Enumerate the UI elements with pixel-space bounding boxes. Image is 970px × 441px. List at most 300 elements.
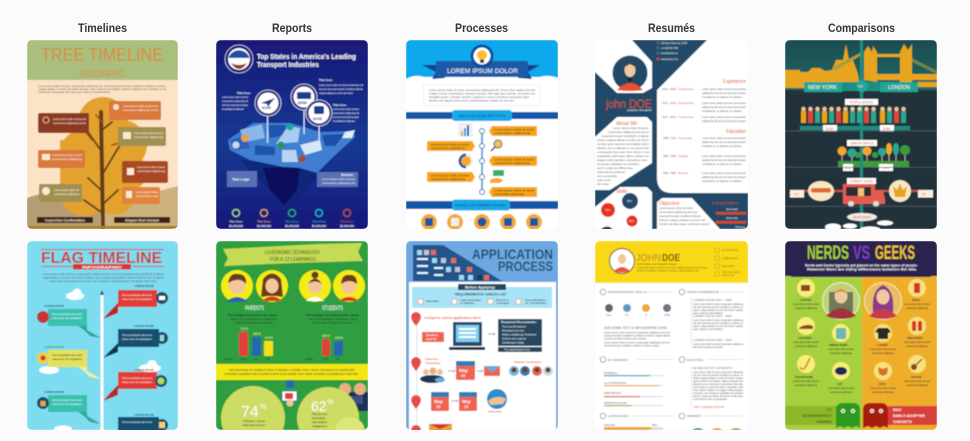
languages: Languages — [712, 200, 738, 205]
source box: Lorem ipsum dolor sit amet — [322, 178, 355, 181]
left item: loafers: LOAFERS — [798, 336, 811, 340]
event box: orange right: consectetur sed — [136, 195, 159, 198]
parents heading: PARENTS — [245, 306, 264, 312]
street food label: STREET FOOD — [850, 180, 874, 184]
stat pin: rail — [306, 100, 332, 146]
yellow header — [595, 241, 748, 283]
about me — [597, 121, 650, 186]
contact details: Tel: 1-202-55-0179 — [722, 249, 738, 252]
people row — [801, 107, 906, 123]
add text block: Lorem ipsum dolor sit amet consectetur adipiscing elit sed — [604, 342, 671, 344]
tree foliage — [59, 97, 147, 216]
portrait — [612, 56, 648, 91]
avatar — [610, 248, 634, 274]
bottom state stats: Title Goes — [312, 220, 326, 224]
intro text: commodo consequat duis aute irure dolor in reprehenderit voluptate velit esse — [49, 280, 158, 283]
contact list: 100 Queen Street City, 12345 — [661, 42, 687, 45]
education text: elit sed eiusmod tempor incididunt ut labore et — [693, 374, 743, 377]
clouds — [39, 288, 161, 432]
skill icons: Pro — [625, 314, 629, 317]
left item: loafers — [793, 317, 819, 348]
about me: laboris nisi ut aliquip ex ea commodo — [597, 147, 650, 150]
yellow banner: CHILDREN LEARNING AND STUDENTS WHO ALSO AGREE THAT THEIR LEARNING EXPERIENCE IS BETTER — [224, 373, 358, 376]
callout texts: Title Goes — [237, 91, 251, 95]
language bar — [604, 424, 663, 430]
event box: olive left: Lorem ipsum dolor sit — [54, 189, 79, 192]
contact details — [714, 248, 740, 277]
flag 5 red: natus error sit voluptatem — [122, 381, 152, 384]
event box: brown left: Lorem ipsum dolor sit amet elit — [53, 118, 86, 121]
deadline box — [422, 332, 444, 342]
parents bar chart: 64% — [265, 335, 273, 340]
flag 2 teal — [37, 304, 101, 338]
right item: sneakers: consectetur adipiscing — [906, 345, 929, 348]
experience: 2012 - 2013 — [662, 102, 677, 105]
stat circle 62 percent: 62 — [311, 398, 327, 414]
step 2 box: Lorem ipsum dolor sit amet — [431, 144, 469, 146]
work timeline: quis nostrud exercitation — [693, 328, 724, 331]
left item: saxophone: consectetur adipiscing — [795, 384, 818, 387]
name: JOHN — [636, 252, 661, 264]
step 3 box: Lorem ipsum dolor sit amet — [494, 158, 534, 162]
selection committee label: Selection — [425, 357, 439, 361]
event box: orange top: Lorem ipsum dolor sit amet elit — [123, 105, 158, 108]
footer labels: Aliquam Erat Volutpat — [125, 218, 160, 222]
subtitle: infographic: INFOGRAPHIC — [79, 69, 124, 79]
eligible candidates — [509, 360, 553, 376]
committee people — [420, 368, 445, 383]
card: tree timeline — [27, 40, 178, 229]
education text: HE BELOW ANY UNIVERSITY — [693, 366, 733, 370]
callout texts: Title Goes — [319, 78, 333, 82]
laptop — [449, 322, 485, 350]
card: reports — [216, 40, 368, 229]
green space values: 40% — [883, 166, 889, 170]
contact details: email@email.com — [722, 257, 738, 260]
stat circle 62 percent: engagement — [312, 425, 327, 428]
parents bar chart: K-12 — [241, 358, 247, 361]
event box: brown left — [38, 113, 89, 133]
card: application process — [406, 241, 558, 435]
contact details: Street Studio — [722, 265, 735, 268]
interest bars: WEB DESIGN — [604, 392, 621, 395]
left item: cat — [828, 362, 854, 394]
work timeline: Lorem ipsum dolor sit amet consectetur adipiscing — [693, 343, 744, 346]
parents bar chart: 3-5 — [254, 358, 258, 361]
stat pin: rail: $12M — [313, 117, 322, 121]
add text block: eiusmod tempor incididunt ut labore et dolore magna — [604, 344, 660, 348]
flag 6 teal: Sed ut perspiciatis unde omnis — [52, 399, 83, 402]
experience: adipiscing elit sed do eiusmod tempor — [702, 106, 746, 109]
right item: guitar: GUITAR — [911, 375, 922, 379]
students bar chart: 65% — [322, 333, 330, 338]
callout texts: sed do eiusmod tempor — [333, 116, 359, 119]
about me: unde omnis — [597, 179, 612, 182]
white shape: objective — [657, 198, 720, 229]
checklist band: or challenge — [460, 302, 475, 305]
left item: cat: consectetur adipiscing — [830, 391, 853, 394]
languages — [712, 200, 746, 229]
students note: use of technology in classroom helps — [308, 318, 359, 321]
intro text: commodo consequat duis aute irure dolor in reprehenderit — [38, 91, 110, 94]
building graphic — [413, 245, 502, 281]
tree trunk — [84, 112, 124, 229]
left item: loafers: Lorem ipsum dolor sit amet — [793, 341, 819, 344]
right item: dog — [870, 362, 896, 394]
checklist band: Before Applying: — [465, 286, 495, 290]
title: flag timeline: FLAG TIMELINE — [41, 250, 162, 267]
about me: consectetur adipiscing elit sed do — [608, 131, 650, 134]
calendar may 15: May — [434, 399, 443, 404]
contact list: jonedoe@jonedoe.com — [660, 52, 678, 55]
section: work experience: WORK EXPERIENCE — [687, 290, 719, 294]
callout texts: incididunt labore — [333, 120, 356, 123]
left item: coffee — [793, 279, 819, 310]
portrait: student girl — [299, 270, 331, 302]
required documents panel: Test confirmations — [502, 326, 527, 328]
white shape: about — [595, 117, 652, 190]
add text block: ut enim ad minim veniam quis nostrud — [604, 338, 647, 340]
header — [785, 241, 937, 276]
right item: guitar — [904, 355, 930, 387]
experience: Lorem ipsum dolor sit amet consectetur — [702, 102, 746, 105]
about me: voluptate velit esse cillum dolore eu — [597, 155, 650, 158]
population values — [785, 125, 937, 132]
left item: saxophone: Lorem ipsum dolor sit amet — [793, 380, 819, 383]
envelope — [484, 366, 500, 376]
step 5 box — [489, 187, 537, 197]
right item: guitar: Lorem ipsum dolor sit amet — [904, 380, 930, 383]
education text — [691, 366, 744, 409]
work timeline: Lorem ipsum dolor sit amet consectetur adipiscing — [693, 319, 744, 322]
step 1 box — [489, 126, 537, 136]
education: Lorem ipsum dolor sit amet consectetur — [702, 155, 746, 158]
education: adipiscing elit sed do eiusmod tempor — [702, 159, 746, 162]
languages: Italian Language — [726, 208, 738, 211]
education text: quis nostrud exercitation ullamco laboris nisi — [693, 380, 743, 383]
about me: dolore magna aliqua ut enim ad minim — [597, 139, 649, 142]
eligible candidates: Eligible Candidates — [514, 360, 542, 364]
callout texts: Lorem ipsum dolor sit amet — [222, 96, 248, 99]
flag 3 navy — [103, 324, 168, 358]
about me: consequat duis aute irure dolor in rep — [597, 151, 650, 154]
event box: olive right — [118, 127, 166, 146]
subtitle: However there are many differences between the two. — [807, 268, 917, 272]
intro text — [42, 273, 165, 283]
right item: soda: consectetur adipiscing — [906, 307, 929, 310]
subtitle — [805, 264, 918, 272]
trees — [838, 143, 910, 167]
stat circle 74 percent: Children report — [243, 420, 265, 423]
event box: rust right — [122, 161, 168, 183]
flag 3 navy: Sed ut perspiciatis unde omnis — [122, 334, 153, 337]
callout texts: magna aliqua ut enim ad minim — [319, 92, 353, 95]
contact list: www.jonedoe.com — [661, 58, 678, 61]
parents note: improves student outcomes — [235, 322, 274, 324]
right item: soda — [904, 279, 930, 310]
logo box: Your Logo — [232, 178, 249, 182]
intro text: Lorem ipsum dolor sit amet, consectetur adipiscing elit, sed do eiusmod tempor incididunt ut labore — [42, 273, 165, 276]
right item: sneakers: SNEAKERS — [907, 336, 923, 340]
education text: 1997 LOREM IPSUM — [693, 405, 725, 409]
city band: LONDON — [888, 85, 910, 91]
event box: olive right: Lorem ipsum dolor sit amet — [134, 132, 163, 135]
flag 7 navy — [118, 413, 168, 435]
left item: dress shirt: consectetur adipiscing — [830, 352, 853, 355]
calendar may 05: May — [459, 368, 468, 373]
work timeline: elit sed eiusmod tempor — [693, 346, 723, 349]
white shape: skills — [595, 187, 652, 229]
education: incididunt ut labore et dolore — [702, 180, 743, 183]
right item: sneakers: Lorem ipsum dolor sit amet — [904, 341, 930, 344]
right item: soda: SODA — [912, 298, 920, 302]
title: PROCESS — [498, 258, 553, 274]
bottom state stats — [229, 210, 354, 228]
required documents panel: Video challenge finished — [502, 334, 537, 336]
subtitle: Nerds and Geeks typically get placed on the same types of people. — [805, 264, 918, 268]
city band: NEW YORK — [808, 85, 838, 91]
header text — [637, 263, 708, 272]
map markers — [232, 124, 306, 162]
right item: dog: consectetur adipiscing — [872, 391, 895, 394]
experience: incididunt ut labore et dolore — [702, 110, 743, 113]
objective: eiusmod tempor incididunt labore — [659, 215, 702, 218]
education text: aliquip ex ea commodo consequat duis aute — [693, 383, 744, 386]
calendar may 25: 25 — [464, 405, 468, 409]
intro text: magna aliqua. Ut enim ad minim veniam, quis nostrud exercitation ullamco laboris nisi ut aliquip — [42, 276, 165, 280]
process line — [416, 320, 418, 432]
callout texts: sed do eiusmod tempor — [222, 104, 248, 107]
stat circle 74 percent: 74 — [241, 404, 259, 421]
step 5 box: Lorem ipsum dolor sit amet — [494, 190, 534, 192]
centre divider — [860, 40, 863, 229]
about me: sunt in culpa qui officia dese — [597, 167, 634, 170]
add text block — [604, 326, 671, 348]
stat circle 74 percent: % — [260, 404, 266, 411]
event box: rust right: Lorem ipsum dolor sit amet — [137, 166, 165, 169]
interest bars: MANIPULATION — [604, 402, 627, 405]
add text block: Lorem ipsum dolor sit amet consectetur adipiscing elit sed — [604, 332, 671, 334]
left item: dress shirt: DRESS SHIRT — [829, 343, 848, 347]
portrait: parent mother — [256, 270, 288, 302]
intro box: Lorem ipsum dolor sit amet, consectetur adipiscing elit. Fusce vitae sapien sed nisl — [429, 89, 536, 92]
students bar chart: K-12 — [323, 358, 329, 361]
section bar 2 — [406, 200, 558, 210]
city band — [804, 80, 918, 92]
section bar 2: PHASELLUS FERMENTUM NIBH — [455, 204, 506, 208]
card: flag timeline — [27, 241, 178, 435]
about me: eiusmod tempor incididunt ut labore — [602, 135, 650, 138]
intro text — [38, 85, 167, 94]
bottom state stats: $1,200,000 — [312, 224, 326, 228]
food count right — [918, 190, 933, 198]
left item: coffee: COFFEE — [800, 298, 811, 302]
intro box: mattis cursus scelerisque. Aenean tempor nibh eget sem lacinia, vel porta orci — [429, 92, 536, 96]
right item: guitar: consectetur adipiscing — [906, 384, 929, 387]
bottom state stats: Title Goes — [285, 220, 299, 224]
education — [663, 129, 746, 183]
section: professional skills: PROFESSIONAL SKILLS — [608, 290, 647, 294]
report title: Top States in America's Leading — [257, 54, 356, 61]
header text: tempor incididunt ut labore et dolore magna aliqua enim — [637, 270, 699, 272]
heading: Comparisons: Comparisons — [828, 21, 895, 35]
education: 2001 - 2005 — [663, 172, 677, 175]
portrait: student boy — [333, 270, 365, 302]
add text block: eiusmod tempor incididunt ut labore et dolore magna aliqua — [604, 334, 671, 338]
biking label: BIKING — [853, 216, 872, 220]
title: GEEKS — [875, 243, 915, 264]
card: nerds vs geeks — [785, 241, 937, 430]
interest bars: BASEBALL — [604, 372, 619, 375]
section: professional skills — [600, 289, 673, 295]
event box: orange right: Lorem ipsum dolor — [136, 191, 158, 194]
stat pin: air — [255, 90, 281, 143]
left item: cat: CAT — [837, 382, 843, 386]
step 1 box: consectetur adipiscing — [494, 132, 531, 135]
bulb icon — [470, 44, 494, 68]
yellow banner: PERCENTAGE OF PARENTS WHO STRONGLY AGREE THAT USING TECHNOLOGY IMPROVES — [229, 369, 355, 372]
checklist band: Transcription — [426, 300, 440, 303]
bottom state stats: $1,200,000 — [340, 224, 354, 228]
blue header — [406, 40, 558, 79]
about me: mollit anim id est laborum — [597, 171, 625, 174]
fries icon — [889, 180, 911, 202]
flag 5 red — [103, 368, 167, 401]
header text: Web Developer and Infographic Designer — [637, 263, 677, 266]
objective — [659, 201, 709, 226]
right item: sneakers — [904, 317, 930, 348]
flag 4 yellow: natus error sit voluptatem — [52, 358, 82, 361]
step 4 box — [427, 172, 475, 182]
required documents panel: Challenges stage — [502, 342, 525, 344]
work timeline: elit sed eiusmod tempor incididunt ut labore et — [693, 306, 743, 309]
stat pin: sea — [291, 84, 317, 134]
hand with tablet — [282, 380, 297, 406]
checklist band — [412, 284, 552, 308]
left item: saxophone — [793, 355, 819, 387]
callout texts: consectetur adipiscing elit — [333, 112, 359, 115]
flag 6 teal: LOREM IPSUM — [44, 390, 64, 394]
callout texts: sed do eiusmod tempor incididunt labore — [319, 88, 364, 91]
objective: minim veniam quis nostrud exercit — [659, 223, 709, 226]
skill icons: HTML — [664, 315, 671, 317]
stat circle 74 percent — [221, 386, 285, 441]
contact list: +1 234 56 789 — [661, 47, 679, 50]
contact details: 123 Lorem Ipsum — [722, 271, 740, 274]
clouds — [825, 220, 893, 232]
students bar chart: 64% — [335, 335, 343, 340]
education: 2008 - 2011 — [663, 137, 677, 140]
right item: t-shirt: consectetur adipiscing — [872, 352, 895, 355]
event box: rust right: consectetur adipiscing — [137, 170, 166, 173]
education: College — [678, 155, 689, 158]
selection committee label: Committee — [425, 361, 441, 365]
card: comparison — [785, 40, 937, 232]
ghost green — [836, 403, 860, 428]
title ribbon — [223, 243, 363, 266]
flag 1 red: Sed ut perspiciatis unde omnis — [122, 294, 153, 297]
parents bar chart: subsidy — [224, 358, 233, 361]
step 4 box: consectetur adipiscing — [431, 178, 466, 181]
students bar chart: 3-5 — [336, 358, 340, 361]
interest bars — [604, 372, 663, 406]
work timeline: Lorem ipsum dolor sit amet consectetur adipiscing — [693, 303, 744, 306]
work timeline: LOREM IPSUM 2007 - 2009 — [693, 298, 732, 302]
small stat circle — [335, 417, 365, 441]
required documents panel: Try application fee — [504, 348, 531, 352]
checklist band: or Certificate — [525, 302, 547, 305]
students bar chart: closing — [305, 358, 313, 361]
left item: cat: Lorem ipsum dolor sit amet — [828, 387, 854, 390]
step 2 box: consectetur adipiscing — [431, 147, 466, 150]
footer: PC — [785, 406, 837, 425]
population label — [845, 99, 878, 105]
icon: money hand — [490, 170, 504, 183]
section: education: EDUCATION — [687, 358, 703, 362]
flag 2 teal: natus error sit voluptatem — [52, 317, 82, 320]
experience: 2011 - 2012 — [662, 116, 677, 119]
bottom state stats: Title Goes — [229, 220, 243, 224]
logo box — [227, 171, 257, 187]
step 2 box — [427, 141, 475, 151]
event box: olive right: consectetur adipiscing — [134, 136, 164, 139]
card: resume — [595, 40, 748, 242]
event box: orange right — [122, 187, 160, 204]
parents note: Percentage of teachers who agree — [228, 313, 277, 317]
parents note: agree use of technology in classroom — [230, 318, 277, 321]
about me: veniam quis nostrud exercitation ullam — [597, 143, 649, 146]
education text: esse cillum dolore eu fugiat nulla pariatur — [693, 389, 743, 392]
source box — [317, 172, 358, 187]
language bar: 90% — [652, 424, 658, 427]
education text: excepteur sint occaecat cupidatat non proident — [693, 392, 743, 395]
flag 4 yellow: Sed ut perspiciatis unde omnis — [52, 354, 83, 357]
population values: 8.4M — [826, 127, 833, 131]
step 3 box: consectetur adipiscing — [494, 162, 531, 165]
title ribbon: FOR K-12 LEARNINGS — [270, 257, 316, 263]
source box: consectetur adipiscing elit — [322, 182, 355, 185]
section: my interest: MY INTEREST — [608, 358, 628, 362]
portrait: geek — [864, 282, 902, 320]
education: adipiscing elit sed do eiusmod tempor — [702, 141, 746, 144]
footer: PC: PC — [827, 408, 832, 412]
work timeline: dolore magna aliqua ut enim ad minim veniam — [693, 309, 743, 312]
bottom state stats: $1,200,000 — [285, 224, 299, 228]
step 1 box: Lorem ipsum dolor sit amet — [494, 128, 534, 132]
New York skyline — [785, 44, 860, 88]
parents bar chart: 6-8 — [266, 358, 270, 361]
event box: orange top — [109, 101, 161, 120]
about me: Lorem ipsum dolor sit amet — [613, 127, 648, 130]
callout texts: Lorem ipsum dolor sit amet consectetur elit — [319, 84, 363, 87]
add text block: ADD SOME TEXT & INFOGRAPHIC DATA — [604, 326, 668, 330]
biking label — [847, 213, 877, 221]
work timeline: dolore magna aliqua ut enim ad minim veniam — [693, 325, 743, 328]
education: School — [678, 172, 689, 175]
students heading: STUDENTS — [322, 306, 343, 312]
students note: them learn better lessons — [312, 322, 353, 324]
skills — [600, 189, 638, 242]
interest bars: ILLUSTRATION — [604, 382, 626, 385]
checklist band: Letter Motivation — [460, 299, 482, 302]
about me: sed ut perspiciatis — [597, 175, 618, 178]
step pins — [411, 312, 421, 435]
population values: 8.6M — [883, 127, 890, 131]
education text: id est laborum sed ut perspiciatis — [693, 398, 728, 401]
logo badge — [225, 45, 253, 73]
parents bar chart: 70% — [240, 326, 248, 331]
about me: About Me — [616, 121, 638, 127]
